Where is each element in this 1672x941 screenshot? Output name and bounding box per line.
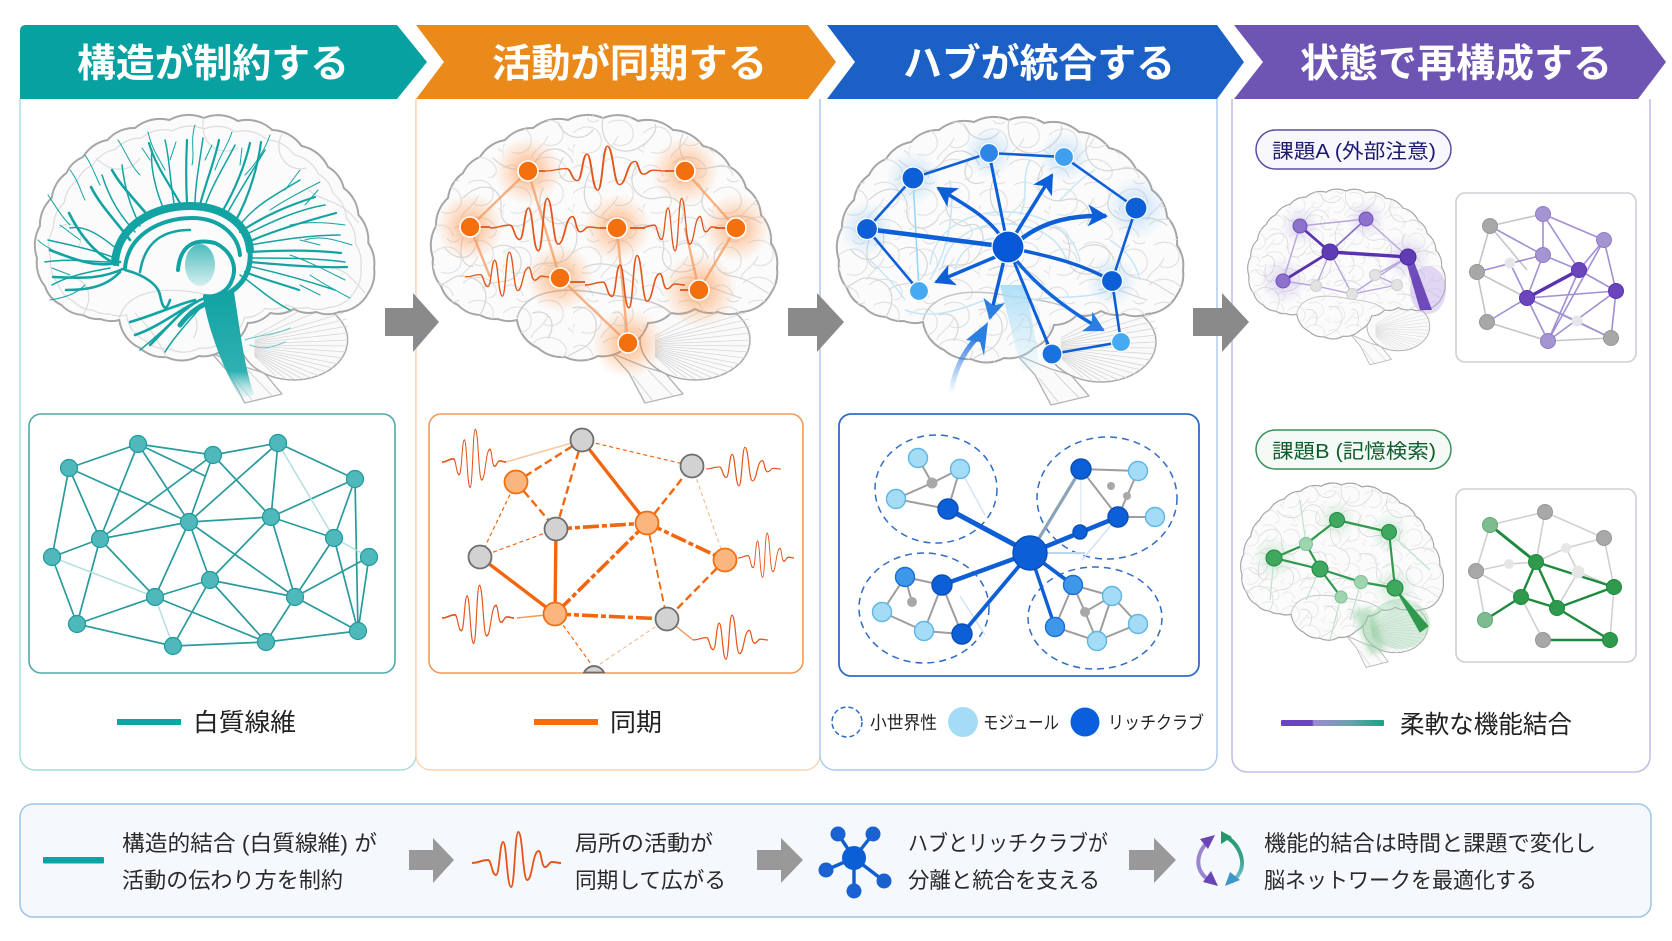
icon: hub — [818, 826, 892, 898]
header: hub: ハブが統合する — [903, 42, 1175, 86]
legend: synchrony — [534, 709, 662, 737]
summary text: function: 脳ネットワークを最適化する — [1264, 868, 1537, 893]
panel: synchrony — [416, 99, 820, 770]
icon: wave — [472, 832, 561, 887]
brain: task B — [1241, 483, 1443, 667]
network: structural — [29, 414, 395, 673]
arrow: structure to activity — [385, 293, 439, 352]
legend: synchrony: 同期 — [610, 709, 662, 737]
legend: small world, modules, rich club: リッチクラブ — [1108, 712, 1204, 733]
panel: structure — [20, 99, 416, 770]
summary text: activity: 同期して広がる — [575, 868, 726, 893]
legend: small world, modules, rich club: 小世界性 — [870, 713, 937, 733]
badge: task B — [1256, 430, 1451, 469]
summary arrow 3 — [1129, 838, 1176, 883]
summary arrow 2 — [757, 838, 803, 883]
brain: task A — [1248, 189, 1446, 365]
badge: task B: 課題B (記憶検索) — [1272, 440, 1436, 463]
legend: flexible connectivity — [1281, 711, 1572, 739]
network: task A — [1456, 193, 1636, 362]
header: activity: 活動が同期する — [492, 43, 767, 86]
header: state: 状態で再構成する — [1300, 43, 1612, 86]
header: hub — [827, 25, 1244, 99]
icon: cycle — [1198, 831, 1242, 886]
summary text: structure: 構造的結合 (白質線維) が — [122, 831, 377, 856]
summary text: function — [1264, 831, 1596, 893]
arrow: hub to state — [1193, 293, 1249, 352]
header: structure — [20, 25, 427, 99]
summary: structural line — [43, 857, 104, 864]
summary arrow 1 — [409, 838, 454, 883]
summary text: activity — [575, 831, 726, 893]
summary text: hub — [908, 831, 1108, 893]
arrow: activity to hub — [788, 293, 844, 352]
header: state — [1234, 25, 1666, 99]
summary bar — [20, 804, 1651, 917]
header: activity — [416, 25, 836, 99]
network: task B — [1456, 489, 1636, 662]
summary text: activity: 局所の活動が — [575, 831, 713, 856]
panel: reconfiguration — [1232, 99, 1650, 772]
brain: white matter tracts — [35, 115, 374, 403]
badge: task A: 課題A (外部注意) — [1272, 140, 1436, 163]
brain: hub integration — [837, 117, 1183, 405]
legend: white matter: 白質線維 — [193, 709, 296, 737]
summary text: structure — [122, 831, 377, 893]
summary text: hub: 分離と統合を支える — [908, 868, 1100, 893]
panel: hubs — [820, 99, 1217, 770]
legend: white matter — [117, 709, 296, 737]
legend: small world, modules, rich club: モジュール — [983, 713, 1059, 733]
brain: synchronized regions — [431, 115, 777, 403]
network: modular hubs — [839, 414, 1199, 676]
summary text: hub: ハブとリッチクラブが — [908, 831, 1108, 856]
legend: flexible connectivity: 柔軟な機能結合 — [1400, 711, 1572, 739]
badge: task A — [1256, 130, 1451, 169]
summary text: function: 機能的結合は時間と課題で変化し — [1264, 831, 1596, 856]
header: structure: 構造が制約する — [77, 43, 349, 86]
legend: small world, modules, rich club — [832, 707, 1204, 737]
summary text: structure: 活動の伝わり方を制約 — [122, 868, 343, 893]
network: synchrony — [429, 414, 803, 673]
